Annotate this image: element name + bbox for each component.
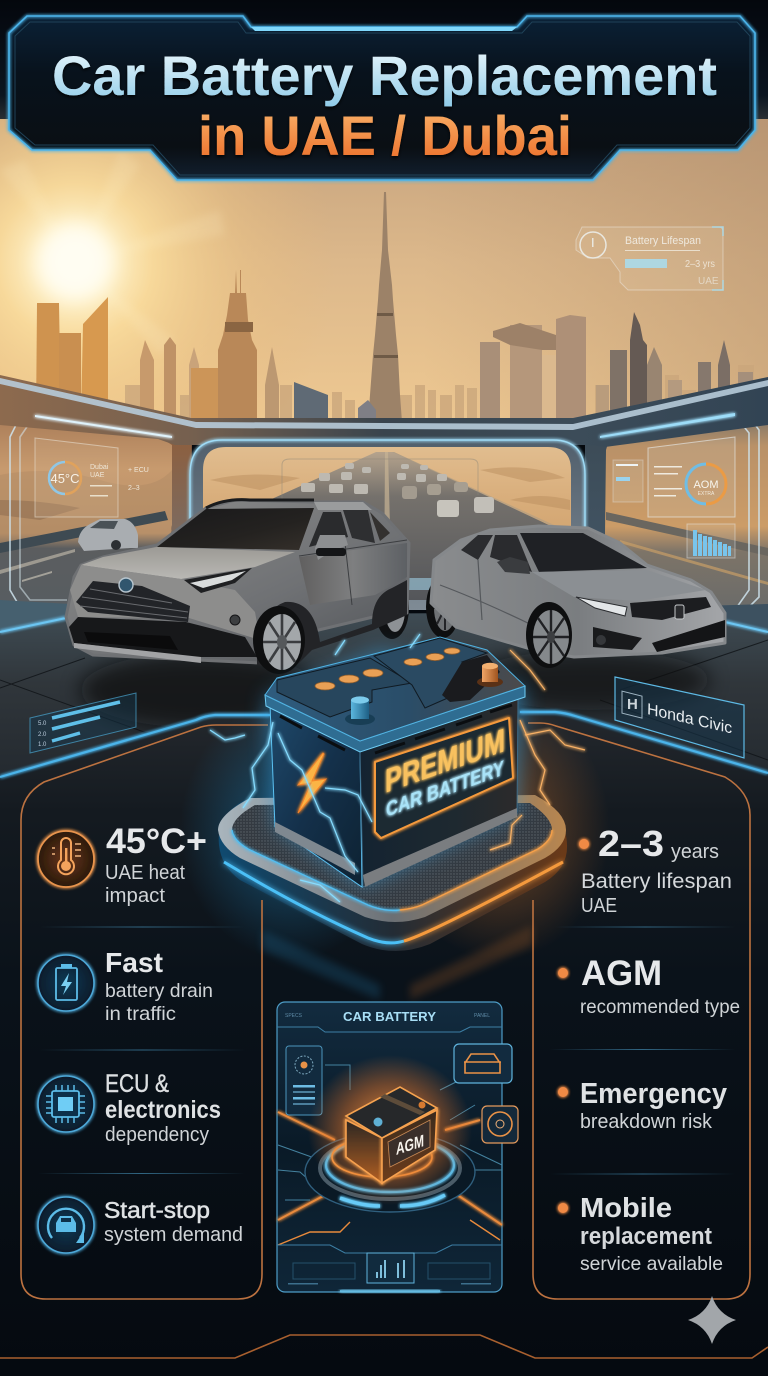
- list item: Mobile replacement: replacement: [580, 1223, 712, 1250]
- Burj Khalifa: [368, 192, 402, 422]
- list item: Start-stop: [38, 1197, 243, 1253]
- battery aura: [265, 650, 525, 887]
- floor seam lines: [0, 640, 768, 760]
- plate rim glow: [232, 830, 400, 910]
- dark glass tower: [294, 382, 328, 422]
- icon: car with rotation arrow: [38, 1197, 94, 1253]
- wheel arch cladding: [257, 580, 407, 672]
- hood: [81, 547, 295, 579]
- panel: right outline: [528, 723, 750, 1299]
- grille: [76, 578, 190, 622]
- list item: 2–3 years: years: [671, 841, 719, 863]
- hood: [532, 570, 706, 601]
- distant haze buildings: [125, 365, 754, 427]
- stepped tower: [218, 270, 257, 422]
- panel heading: CAR BATTERY: [343, 1009, 436, 1024]
- list item: ECU & electronics: ECU &: [105, 1070, 169, 1098]
- car reflections: [80, 652, 320, 728]
- list item: Start-stop: Start-stop: [104, 1197, 210, 1223]
- list item: Mobile replacement: Mobile: [580, 1192, 672, 1223]
- blue frame line: [0, 712, 768, 777]
- list item: Fast: Fast: [105, 947, 163, 978]
- list item: AGM: recommended type: [580, 997, 740, 1018]
- list item: 45°C+: 45°C+: [106, 822, 207, 861]
- list item: 2–3 years: [579, 823, 732, 917]
- small HUD tag: bars: [30, 693, 136, 753]
- Dubai skyline: [36, 192, 754, 427]
- list item: AGM: AGM: [581, 954, 662, 993]
- door panels: [299, 543, 407, 605]
- icon: lightning bolt: [298, 753, 326, 813]
- blue and orange auras: [180, 700, 610, 960]
- list item: 2–3 years: Battery lifespan: [581, 870, 732, 893]
- right face: [360, 698, 518, 887]
- title line 1: Car Battery Replacement: [52, 44, 717, 107]
- glowing beam right: [600, 413, 735, 438]
- list item: 2–3 years: UAE: [581, 895, 617, 917]
- left towers: [36, 303, 61, 420]
- vent slots: [280, 705, 512, 753]
- gantry: [282, 459, 478, 510]
- left pillar: [158, 436, 192, 605]
- label: PREMIUM: PREMIUM: [385, 722, 505, 801]
- HUD: battery lifespan: [576, 227, 723, 290]
- rear wheel: [426, 576, 460, 638]
- center panel: AGM schematic: PANEL: [474, 1013, 490, 1019]
- small HUD tag: bars: 2.0: [38, 732, 47, 738]
- HUD: AGM: [613, 437, 735, 517]
- desert dunes: [0, 470, 172, 545]
- right towers: [480, 342, 500, 422]
- lower dark area: [0, 712, 768, 1376]
- icon: chip: [38, 1076, 94, 1132]
- left face: [270, 705, 362, 887]
- list item: 2–3 years: 2–3: [598, 823, 664, 864]
- front wheel: [526, 602, 572, 668]
- side mirror: [315, 535, 348, 560]
- scene: desert sky with sun: [0, 118, 768, 438]
- list item: Mobile replacement: [558, 1192, 723, 1275]
- glowing beam left: [35, 415, 172, 438]
- list item: 45°C+: [38, 822, 207, 907]
- sun rays: [0, 150, 225, 355]
- road: [203, 452, 570, 600]
- footer strip: [277, 1245, 502, 1284]
- HUD: temperature: [35, 438, 149, 517]
- positive terminal: [477, 663, 503, 687]
- headlight: [576, 597, 627, 616]
- door shadows: [440, 560, 532, 625]
- center panel: AGM schematic: SPECS: [285, 1013, 303, 1019]
- list item: Fast: [38, 947, 213, 1025]
- guardrail: [606, 512, 768, 556]
- lower intakes: [593, 627, 642, 650]
- footer frame: [0, 1335, 768, 1358]
- HUD: battery lifespan: Battery Lifespan: [625, 235, 701, 247]
- dashboard side window: right: [585, 400, 768, 630]
- negative terminal: [345, 696, 375, 725]
- HUD: AGM: EXTRA: [698, 491, 715, 497]
- car: silver Honda Civic: [426, 526, 725, 668]
- top dark header band: [0, 0, 768, 119]
- floor light lines: [0, 618, 768, 632]
- HUD: temperature: + ECU: [128, 467, 149, 474]
- icon: battery: [38, 955, 94, 1011]
- center panel: AGM schematic: [277, 1002, 518, 1292]
- list item: Fast: in traffic: [105, 1003, 176, 1025]
- fascia: [70, 565, 260, 640]
- pillar right: [585, 430, 612, 615]
- side windows: [309, 512, 348, 547]
- HUD: bar chart: [687, 524, 735, 558]
- title panel: [9, 16, 755, 180]
- central window: highway: [190, 440, 585, 610]
- icon: thermometer: [38, 831, 94, 887]
- car: silver Toyota RAV4: [66, 500, 409, 674]
- small HUD tag: bars: 1.0: [38, 742, 47, 748]
- lid top: [265, 637, 525, 741]
- list item: 45°C+: impact: [105, 885, 165, 907]
- icon: sparkle watermark: [688, 1296, 736, 1344]
- panel: left outline: [21, 725, 268, 1299]
- body: [66, 500, 409, 663]
- dashboard side window: left: [0, 415, 172, 630]
- body: [431, 526, 725, 657]
- list item: Fast: battery drain: [105, 980, 213, 1002]
- premium car battery: [210, 634, 585, 902]
- card: status: [286, 1046, 322, 1115]
- list item: Emergency: [558, 1078, 727, 1133]
- list item: Emergency: breakdown risk: [580, 1111, 713, 1133]
- electric arcs: orange: [490, 650, 585, 850]
- HUD: temperature: UAE: [90, 472, 105, 479]
- lid lip: [265, 686, 525, 752]
- raised covers: [277, 658, 412, 717]
- platform rings: [305, 1132, 475, 1212]
- fog light: [230, 615, 240, 625]
- showroom floor: [0, 578, 768, 790]
- headlight: [184, 568, 252, 593]
- HUD: temperature: 2–3: [128, 485, 140, 492]
- HUD: battery lifespan: UAE: [698, 276, 719, 287]
- list item: AGM: [558, 954, 740, 1018]
- mirror: [497, 557, 530, 574]
- dashboard upper frame: [0, 375, 768, 447]
- card: round icon: [482, 1106, 518, 1143]
- model tag: Honda Civic: Honda Civic: [647, 700, 732, 737]
- list item: Emergency: Emergency: [580, 1078, 727, 1110]
- electric arcs: blue: [210, 634, 420, 902]
- model tag: Honda Civic: H: [627, 696, 638, 713]
- pedestal reflection: [262, 925, 533, 1000]
- model tag: Honda Civic: [615, 677, 744, 758]
- rear wheel: [375, 577, 409, 639]
- label panel: [375, 718, 513, 838]
- front wheel: [253, 606, 305, 674]
- HUD: battery lifespan: 2–3 yrs: [685, 259, 715, 270]
- lower bumper: [69, 617, 257, 657]
- side windows: [461, 535, 493, 560]
- windshield: [157, 508, 314, 550]
- AGM battery: AGM: [396, 1130, 424, 1159]
- list item: Start-stop: system demand: [104, 1224, 243, 1246]
- road line: [0, 549, 75, 574]
- list item: ECU & electronics: electronics: [105, 1096, 221, 1124]
- grille: [630, 597, 711, 620]
- HUD: AGM: AOM: [693, 479, 719, 491]
- label: CAR BATTERY: CAR BATTERY: [386, 755, 504, 822]
- cover vent caps: [315, 648, 460, 690]
- list item: Mobile replacement: service available: [580, 1253, 723, 1275]
- window brackets: [10, 417, 67, 607]
- small HUD tag: bars: 5.0: [38, 721, 47, 727]
- window brackets: [737, 415, 759, 609]
- title line 2: in UAE / Dubai: [198, 104, 572, 167]
- roof rail: [206, 500, 314, 508]
- header line: [277, 1027, 502, 1032]
- base rails: [275, 822, 355, 875]
- list item: ECU & electronics: [38, 1070, 221, 1146]
- AGM label: [388, 1120, 430, 1167]
- window glow line: [190, 440, 585, 540]
- AGM battery: [308, 1055, 472, 1205]
- pedestal light strip: [224, 862, 404, 943]
- list item: 45°C+: UAE heat: [105, 862, 185, 884]
- HUD: temperature: 45°C: [50, 471, 80, 486]
- pedestal: [218, 795, 567, 951]
- card: car icon: [454, 1044, 512, 1083]
- windshield: [520, 533, 647, 572]
- distant car: [78, 519, 138, 551]
- dunes: [210, 467, 570, 510]
- guardrail: [0, 511, 168, 553]
- distant traffic: [301, 463, 494, 517]
- circuit traces: [278, 1112, 502, 1245]
- list item: ECU & electronics: dependency: [105, 1124, 209, 1146]
- HUD: temperature: Dubai: [90, 464, 109, 471]
